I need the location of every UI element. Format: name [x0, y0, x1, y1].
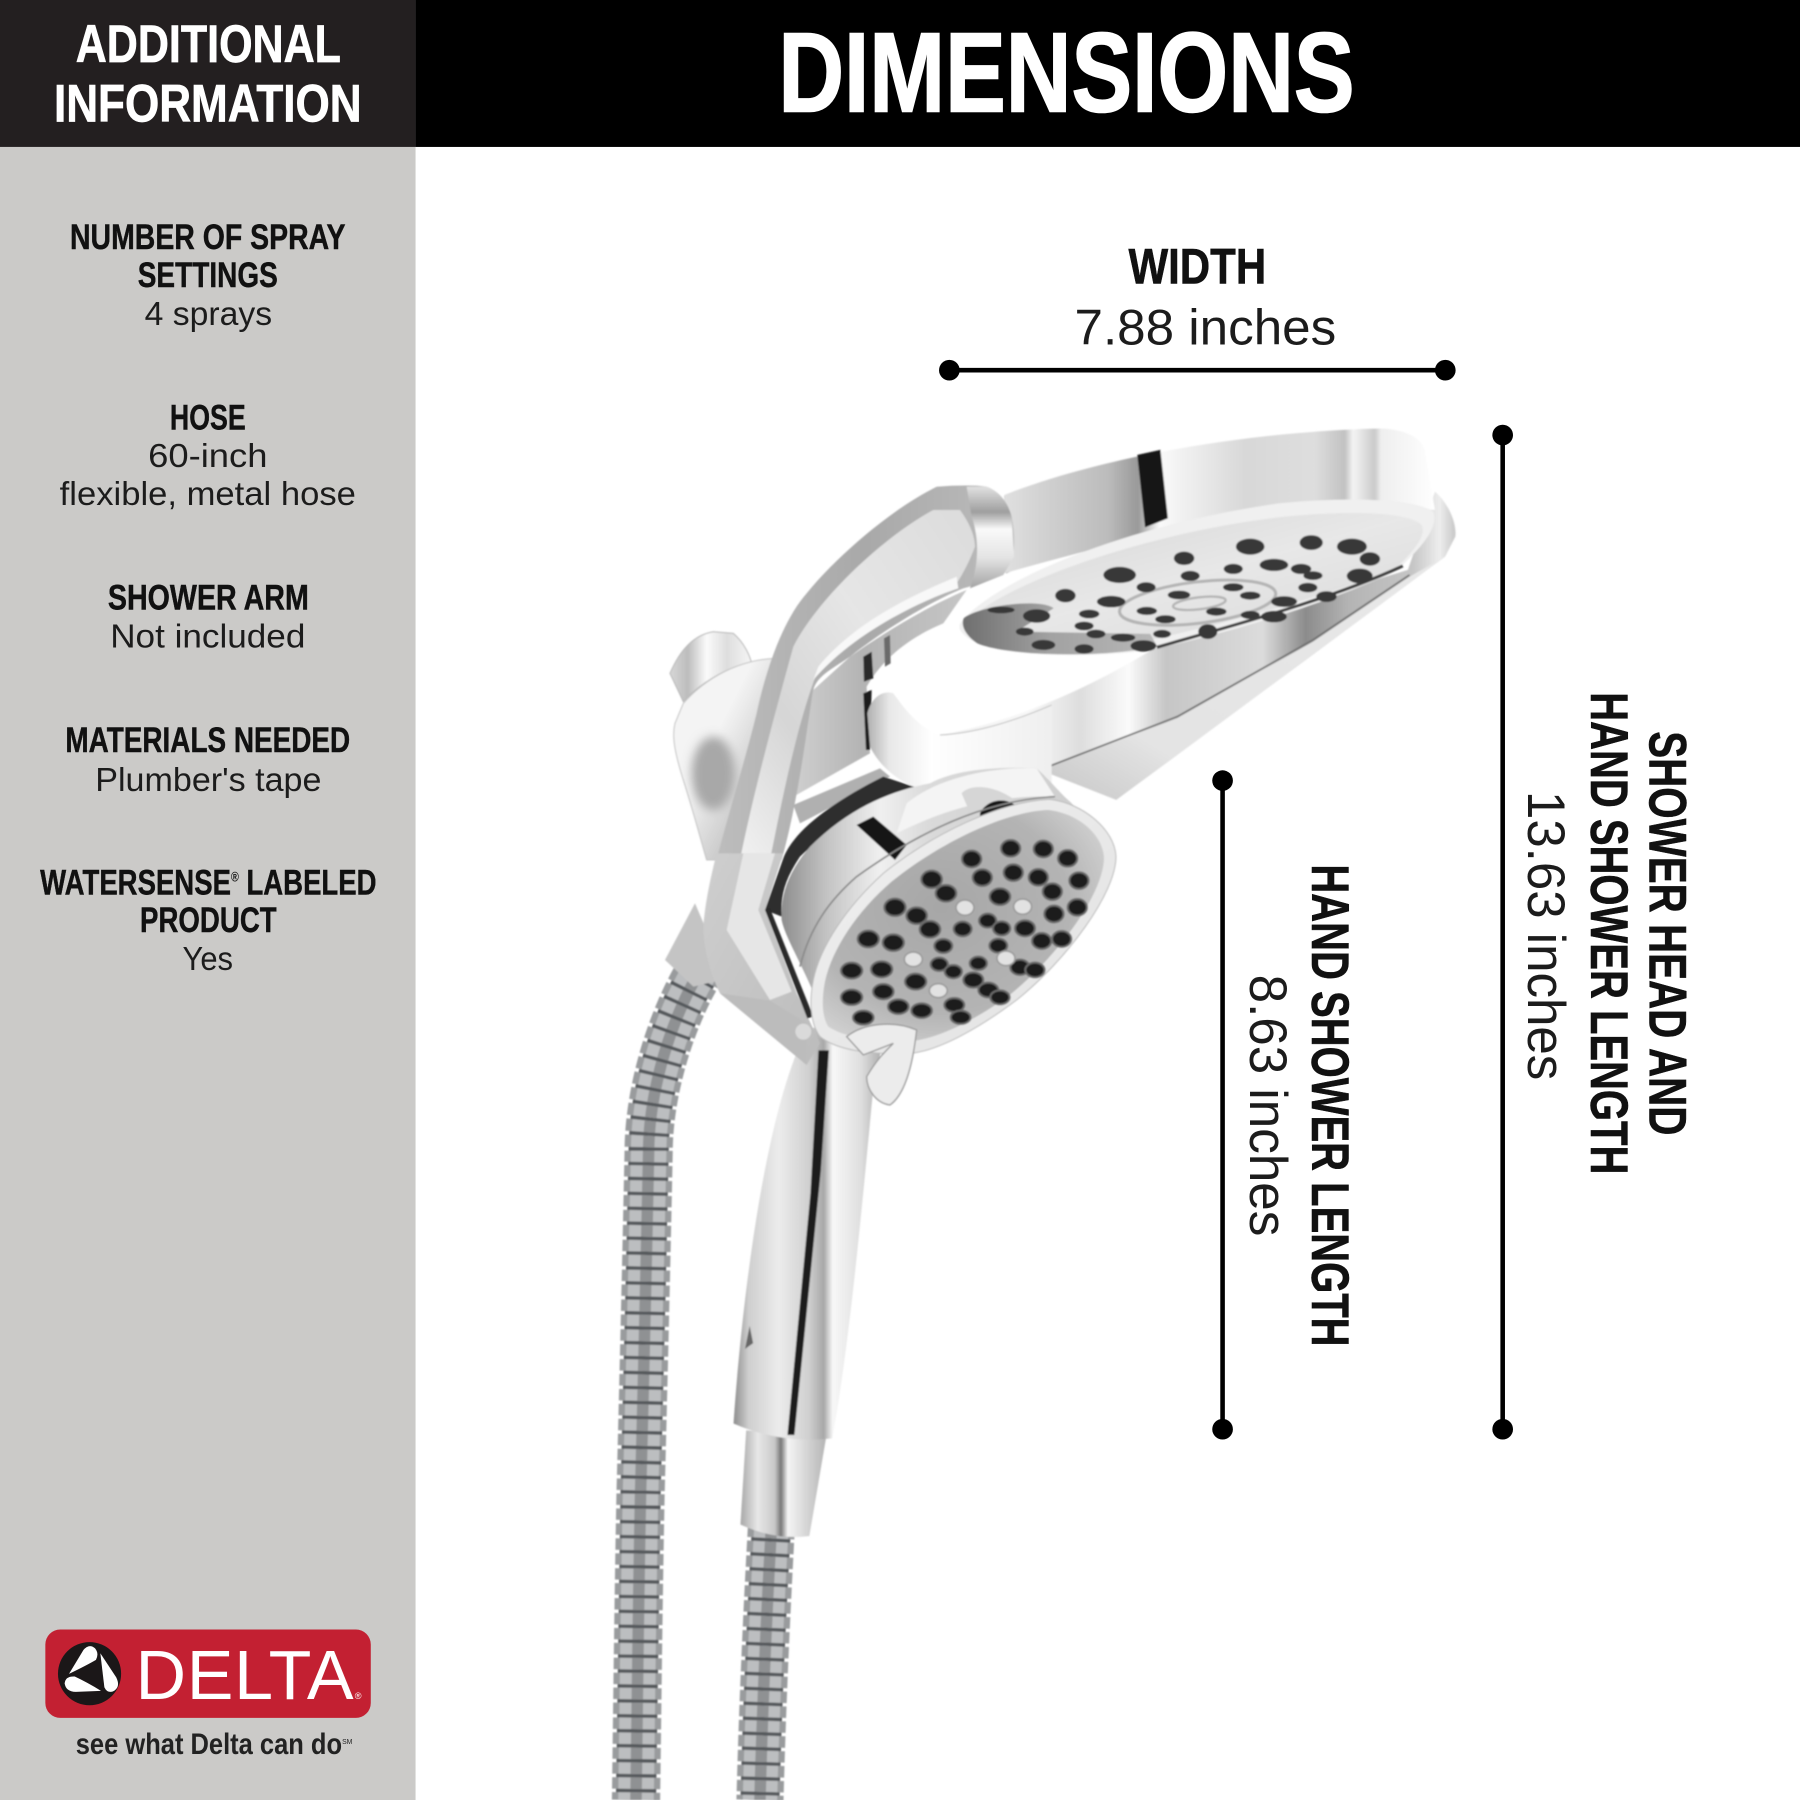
- label: shower head and hand shower length: HAND SHOWER LENGTH: [1579, 692, 1638, 1174]
- spec: shower arm: [108, 578, 309, 655]
- spec: watersense labeled product: PRODUCT: [140, 900, 277, 940]
- hand shower head: [703, 768, 1116, 1105]
- clamp lower band: [703, 853, 820, 1065]
- spec: number of spray settings: NUMBER OF SPRAY: [70, 217, 346, 257]
- curved band panel: [740, 510, 975, 860]
- clear LED nozzles: [904, 899, 1032, 998]
- shell: [781, 768, 1110, 1000]
- spec: shower arm: SHOWER ARM: [108, 578, 309, 618]
- spray nozzles: [987, 535, 1380, 654]
- panel lower highlight: [813, 577, 958, 680]
- face rim: [959, 499, 1434, 655]
- shower head: arm and faces: [920, 428, 1456, 800]
- spec: watersense labeled product: Yes: [183, 941, 233, 978]
- header: additional information: [0, 0, 416, 147]
- product photo: hand shower and shower head: [636, 428, 1456, 1800]
- hand shower handle: [734, 1027, 884, 1440]
- top band with black reflection: [1004, 428, 1435, 573]
- flexible hose left: [636, 967, 703, 1800]
- spec: number of spray settings: [70, 217, 346, 333]
- spec: shower arm: Not included: [110, 618, 305, 655]
- band end cap: [967, 487, 1014, 588]
- curved band outer: [717, 485, 1014, 860]
- dark gap: [765, 768, 933, 917]
- sidebar panel: additional information: [0, 147, 416, 1800]
- Delta logo: see what Delta can do: [76, 1728, 342, 1761]
- mount body: [674, 658, 775, 860]
- mount body shading: [692, 737, 735, 810]
- spec: hose: HOSE: [170, 397, 246, 437]
- face rim: [811, 799, 1116, 1054]
- spec: hose: [60, 397, 356, 513]
- label: hand shower length: [1238, 864, 1359, 1347]
- dimension line: width: [939, 360, 1456, 381]
- swoosh edge: [940, 705, 1052, 735]
- spec: watersense labeled product: [40, 862, 377, 978]
- crescent arm: [920, 492, 1456, 800]
- spec: materials needed: Plumber's tape: [95, 762, 321, 799]
- left chrome reflection: [963, 603, 1157, 654]
- neck joint: [1004, 488, 1052, 573]
- spec: number of spray settings: SETTINGS: [138, 255, 278, 295]
- label: width: WIDTH: [1128, 238, 1266, 295]
- header: dimensions title: DIMENSIONS: [778, 9, 1355, 136]
- hose connector stub: [665, 903, 722, 987]
- spec: watersense labeled product: WATERSENSE: [40, 862, 287, 902]
- label: shower head and hand shower length: [1516, 692, 1697, 1174]
- face plate: [970, 513, 1423, 640]
- spec: watersense labeled product: LABELED: [239, 862, 377, 902]
- spec: hose: flexible, metal hose: [60, 476, 356, 513]
- dimension line: overall length: [1492, 425, 1513, 1440]
- arm edge line: [1042, 575, 1410, 769]
- inner chrome behind band: [793, 590, 967, 797]
- header: additional information: ADDITIONAL: [76, 15, 341, 74]
- spec: watersense labeled product: ®: [231, 870, 239, 885]
- header: additional information: INFORMATION: [54, 75, 362, 134]
- spec: number of spray settings: 4 sprays: [145, 296, 272, 333]
- spec: hose: 60-inch: [148, 438, 267, 475]
- label: width: [1074, 238, 1336, 355]
- spec: materials needed: [65, 720, 350, 799]
- arm lower wedge: [1042, 557, 1445, 800]
- Delta logo: SM: [342, 1739, 353, 1746]
- mount knob: [670, 632, 752, 702]
- hand shower collar: [740, 1430, 827, 1537]
- dark lower rim: [1157, 566, 1403, 647]
- face plate: [823, 810, 1104, 1042]
- label: hand shower length: HAND SHOWER LENGTH: [1300, 864, 1359, 1347]
- concentric rings: [1117, 573, 1278, 633]
- Delta logo: DELTA: [135, 1636, 354, 1714]
- Delta logo: ®: [355, 1691, 362, 1701]
- crescent swoosh: [867, 692, 1052, 788]
- label: hand shower length: 8.63 inches: [1238, 975, 1297, 1236]
- mount and front band: [670, 485, 1052, 860]
- Delta logo: [45, 1630, 371, 1761]
- spec: materials needed: MATERIALS NEEDED: [65, 720, 350, 760]
- spray nozzles: [841, 840, 1089, 1025]
- label: shower head and hand shower length: SHOWER HEAD AND: [1638, 731, 1697, 1135]
- dimension line: hand shower length: [1212, 770, 1233, 1440]
- label: shower head and hand shower length: 13.63 inches: [1516, 791, 1575, 1080]
- spray selector lever: [847, 1024, 917, 1105]
- flexible hose right: [760, 1527, 771, 1800]
- header: dimensions title: [416, 0, 1800, 147]
- label: width: 7.88 inches: [1074, 298, 1336, 355]
